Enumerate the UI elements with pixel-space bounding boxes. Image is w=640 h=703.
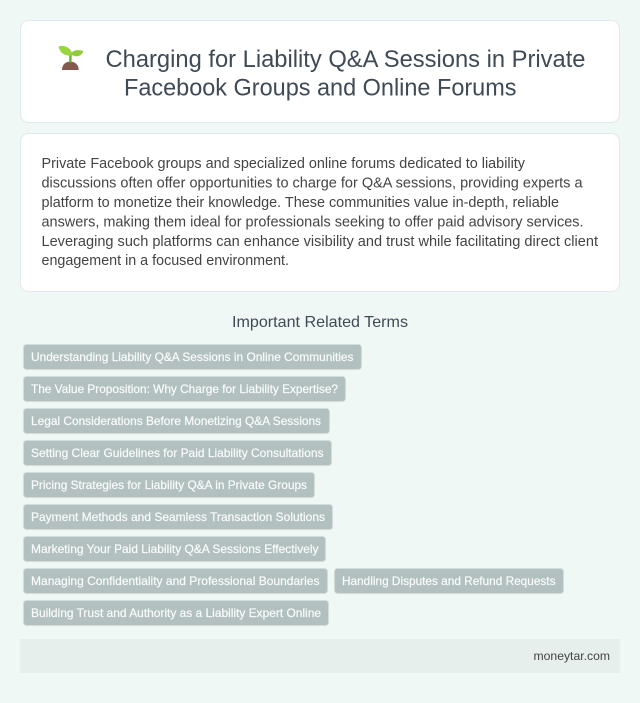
tag: value proposition <box>24 376 346 402</box>
tag: pricing strategies: Pricing Strategies for Liability Q&A in Private Groups <box>31 478 307 492</box>
text block: introduction paragraph <box>42 156 598 269</box>
tag: pricing strategies <box>24 472 314 498</box>
text block: introduction paragraph: Leveraging such platforms can enhance visibility and trust while facilitating direct client <box>42 234 598 250</box>
title: Facebook Groups and Online Forums <box>124 74 516 102</box>
tag: confidentiality <box>24 568 328 594</box>
title <box>106 46 586 102</box>
tag: legal considerations: Legal Considerations Before Monetizing Q&A Sessions <box>31 414 321 428</box>
text block: introduction paragraph: platform to monetize their knowledge. These communities value in-depth, reliable <box>42 195 559 211</box>
tag: legal considerations <box>24 408 330 434</box>
tag: payment methods <box>24 504 332 530</box>
footer <box>20 639 620 673</box>
heading: important related terms: Important Related Terms <box>232 314 408 331</box>
panel: introduction <box>20 134 620 292</box>
tag: disputes and refunds <box>334 568 564 594</box>
tag: clear guidelines <box>24 440 332 466</box>
tag: confidentiality: Managing Confidentiality and Professional Boundaries <box>31 574 320 588</box>
title: Charging for Liability Q&A Sessions in Private <box>106 46 586 73</box>
tag: marketing: Marketing Your Paid Liability Q&A Sessions Effectively <box>31 542 318 556</box>
tag list <box>24 344 564 626</box>
text block: introduction paragraph: answers, making them ideal for professionals seeking to offer paid advisory services. <box>42 214 584 230</box>
tag: understanding liability <box>24 344 362 370</box>
text block: introduction paragraph: Private Facebook groups and specialized online forums dedicated to liability <box>42 156 526 172</box>
tag: clear guidelines: Setting Clear Guidelines for Paid Liability Consultations <box>31 446 324 460</box>
panel: title card <box>20 20 620 122</box>
tag: payment methods: Payment Methods and Seamless Transaction Solutions <box>31 510 325 524</box>
text block: introduction paragraph: engagement in a focused environment. <box>42 253 289 269</box>
tag: marketing <box>24 536 326 562</box>
icon: sprout <box>59 46 83 70</box>
text block: introduction paragraph: discussions often offer opportunities to charge for Q&A sessions, providing experts a <box>42 176 582 192</box>
tag: trust and authority <box>24 600 328 626</box>
tag: trust and authority: Building Trust and Authority as a Liability Expert Online <box>31 606 321 620</box>
footer source text: moneytar.com <box>534 649 610 663</box>
tag: disputes and refunds: Handling Disputes and Refund Requests <box>342 574 556 588</box>
tag: understanding liability: Understanding Liability Q&A Sessions in Online Communities <box>31 350 354 364</box>
tag: value proposition: The Value Proposition: Why Charge for Liability Expertise? <box>31 382 338 396</box>
